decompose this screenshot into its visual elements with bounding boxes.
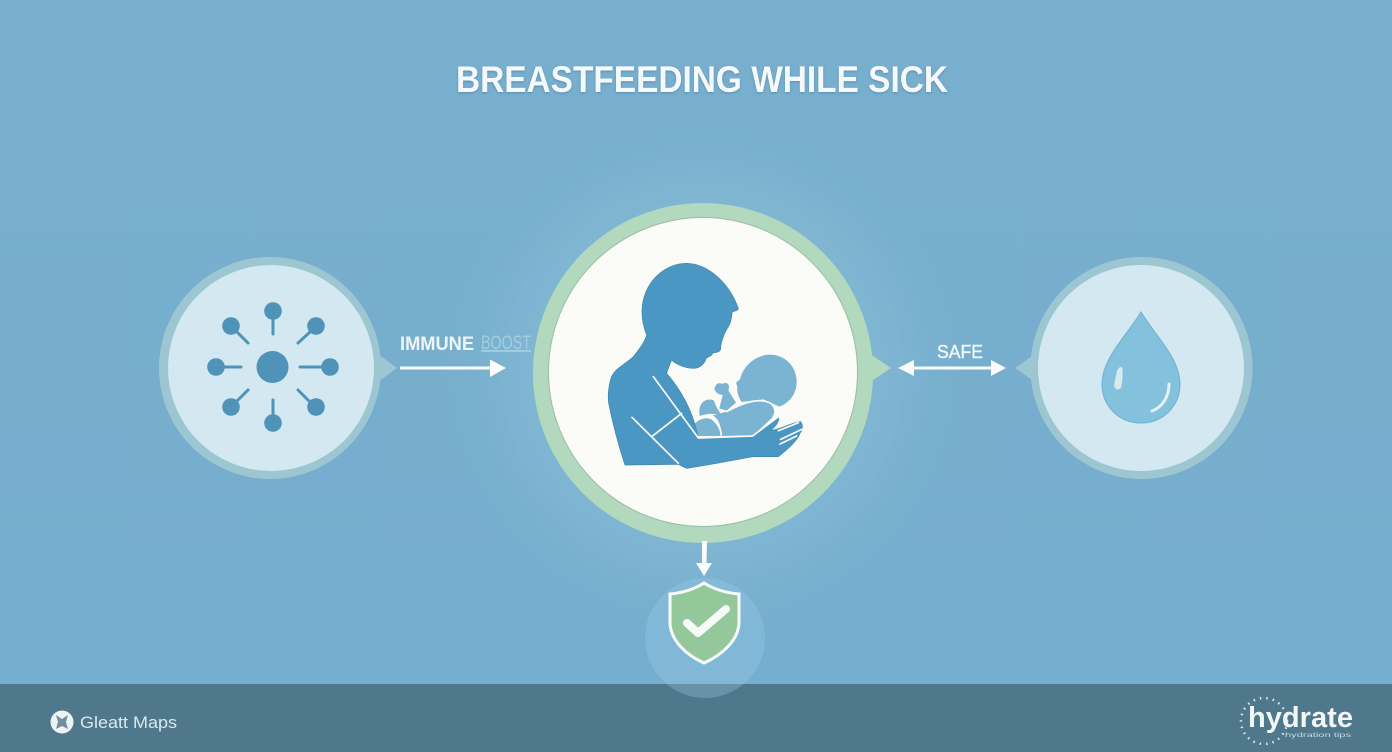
label: immune boost	[400, 333, 531, 355]
mother	[608, 263, 802, 468]
pointer	[378, 354, 397, 382]
title: BREASTFEEDING WHILE SICK	[456, 59, 948, 100]
icon: water drop	[1102, 312, 1180, 423]
label: immune boost: IMMUNE	[400, 334, 474, 355]
panel: mother and baby circle	[533, 203, 891, 543]
pointers	[870, 354, 891, 382]
icon: shield	[670, 583, 739, 663]
footer brand: hydrate logo	[1241, 698, 1353, 744]
arrow: safe double-headed	[898, 360, 1006, 376]
footer bar	[0, 684, 1392, 752]
icon: mother holding baby	[608, 263, 802, 468]
baby	[693, 355, 797, 436]
mother outlines	[632, 377, 802, 463]
label: immune boost: BOOST	[481, 333, 531, 354]
label: safe: SAFE	[937, 341, 983, 362]
baby outlines	[693, 401, 775, 437]
footer brand: left logo	[50, 710, 177, 734]
panel: immune system circle	[159, 257, 397, 479]
footer brand: hydrate logo: hydrate	[1248, 702, 1353, 734]
footer brand: hydrate logo: hydration tips	[1285, 733, 1351, 739]
icon: immune cells	[207, 302, 339, 432]
arrow: down to shield	[696, 541, 712, 576]
icon: check mark	[687, 609, 726, 633]
arrow: immune to mother	[400, 360, 506, 377]
panel: hydration circle	[1015, 257, 1252, 479]
footer brand: left logo: Gleatt Maps	[80, 714, 177, 732]
panel: shield badge	[645, 578, 765, 698]
pointer	[1015, 354, 1035, 382]
